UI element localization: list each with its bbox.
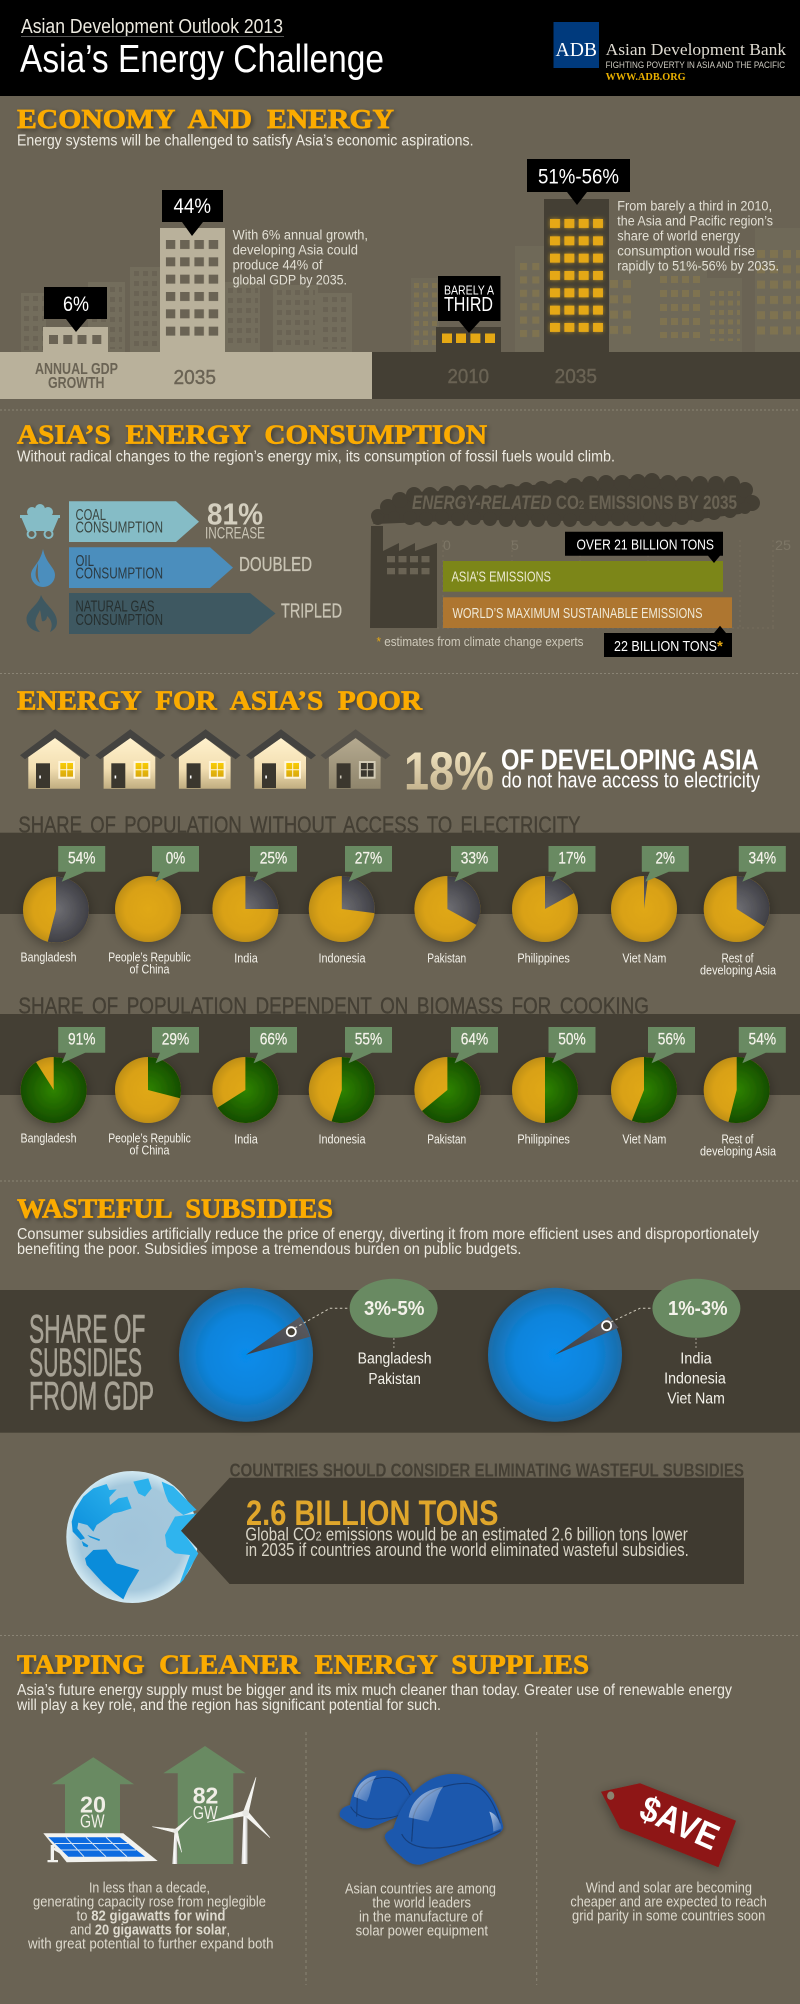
arrow: 20 GW solar: 20 [80, 1791, 106, 1817]
pie: Rest of developing Asia 54%: developing Asia [700, 1145, 776, 1159]
caption: manufacture leaders: solar power equipment [356, 1922, 489, 1939]
caption: grid parity: grid parity in some countries soon [572, 1908, 765, 1925]
pie: Philippines 50% [512, 1027, 596, 1146]
pie: Bangladesh 54%: 54% [68, 849, 96, 867]
text block: 44% of GDP [233, 227, 368, 287]
bar: Asia's emissions [443, 561, 723, 592]
chart heading: without access to electricity: SHARE OF POPULATION WITHOUT ACCESS TO ELECTRICITY [18, 811, 580, 837]
chart: GDP skyline [0, 190, 372, 399]
callout: eliminate wasteful subsidies: Global CO2 emissions would be an estimated 2.6 billion tons lower [245, 1525, 688, 1545]
small lit building 2010 [436, 327, 501, 353]
pie: People's Republic of China 29%: People’s Republic [108, 1132, 191, 1146]
pie: 3%-5% of GDP: Pakistan [368, 1371, 421, 1388]
pie: Bangladesh 54%: Bangladesh [20, 950, 77, 964]
pie: Rest of developing Asia 34%: Rest of [722, 952, 754, 966]
pie: Philippines 50%: 50% [558, 1030, 586, 1048]
caption: grid parity: cheaper and are expected to reach [570, 1894, 767, 1911]
text block: share of world energy [617, 199, 779, 274]
stat: 81% increase: INCREASE [205, 524, 265, 543]
pie: Philippines 17% [512, 846, 596, 965]
caption: grid parity: Wind and solar are becoming [586, 1880, 752, 1897]
stat: 18% without electricity [404, 741, 760, 801]
ground band light [0, 352, 372, 399]
arrow: natural gas consumption: NATURAL GAS [76, 599, 154, 616]
section intro: wasteful subsidies: benefiting the poor. Subsidies impose a tremendous burden on public budgets. [17, 1241, 521, 1258]
caption: capacity growth: generating capacity rose from neglegible [33, 1894, 266, 1911]
pie: Pakistan 33%: Pakistan [427, 951, 466, 965]
stat: 81% increase [205, 496, 265, 543]
section intro: economy and energy: Energy systems will be challenged to satisfy Asia’s economic aspirations. [17, 133, 474, 150]
callout: 6% [44, 287, 107, 332]
pie: 3%-5% of GDP [179, 1279, 438, 1422]
pie: Philippines 50%: Philippines [517, 1132, 570, 1146]
caption: capacity growth: to 82 gigawatts for wind [76, 1908, 226, 1925]
arrow: 82 GW wind [163, 1746, 246, 1864]
ADB logo: Asian Development Bank [606, 40, 787, 59]
panel title: SHARE OF [29, 1308, 145, 1352]
house 4 [246, 729, 316, 789]
caption: capacity growth: with great potential to further expand both [27, 1936, 274, 1953]
pie: Pakistan 64%: Pakistan [427, 1132, 466, 1146]
panel: share of subsidies from GDP [0, 1279, 800, 1433]
pie: Viet Nam 2% [611, 846, 689, 965]
callout: 22 billion tons: 22 BILLION TONS [614, 638, 717, 655]
callout: over 21 billion tons [565, 532, 723, 563]
section intro: cleaner energy: Asia’s future energy supply must be bigger and its mix much cleaner than today. Greater use of renewable energy [17, 1682, 732, 1699]
pie: Viet Nam 2%: Viet Nam [622, 951, 666, 965]
pie: 1%-3% of GDP: Viet Nam [667, 1390, 725, 1407]
text block: share of world energy: From barely a third in 2010, [617, 199, 772, 214]
pie chart row: without electricity [20, 846, 786, 978]
back hard hat [340, 1770, 413, 1828]
text block: 44% of GDP: With 6% annual growth, [233, 227, 368, 242]
pie: 3%-5% of GDP: Bangladesh [358, 1350, 432, 1367]
icon: oil drop [31, 549, 55, 587]
pie: 1%-3% of GDP: 1%-3% [668, 1298, 728, 1320]
label: 2010: 2010 [448, 366, 489, 388]
pie: Rest of developing Asia 54% [700, 1027, 786, 1159]
chart: energy consumption skyline [372, 159, 800, 399]
icon: globe [66, 1471, 198, 1603]
pie: India 66% [212, 1027, 297, 1146]
pie: People's Republic of China 29%: 29% [162, 1030, 190, 1048]
text block: 44% of GDP: developing Asia could [233, 242, 358, 257]
axis labels: 0 [443, 537, 451, 553]
arrow: oil consumption: CONSUMPTION [76, 566, 163, 583]
section heading: energy for Asia's poor: ENERGY FOR ASIA’S POOR [17, 684, 423, 715]
smoke cloud with chart title: ENERGY-RELATED CO2 EMISSIONS BY 2035 [412, 493, 737, 514]
ADB logo: ADB [556, 39, 597, 61]
panel title: FROM GDP [29, 1374, 154, 1418]
pie: People's Republic of China 0% [108, 846, 199, 976]
section intro: cleaner energy [16, 1682, 732, 1714]
pie: India 25% [212, 846, 297, 965]
pie: Pakistan 33% [414, 846, 498, 965]
icon: solar panel [43, 1833, 158, 1862]
icon: wind turbines [152, 1777, 270, 1864]
caption: manufacture leaders: in the manufacture of [359, 1908, 483, 1925]
axis labels: 25 [775, 537, 791, 553]
label: annual GDP growth: GROWTH [48, 375, 104, 392]
arrow: oil consumption: OIL [76, 553, 94, 570]
stat: 81% increase: 81% [207, 496, 263, 531]
section heading: economy and energy: ECONOMY AND ENERGY [17, 103, 394, 134]
callout: eliminate wasteful subsidies: 2.6 BILLION TONS [246, 1494, 498, 1533]
arrow: oil consumption [69, 547, 233, 588]
arrow: coal consumption [69, 501, 199, 542]
pie: Rest of developing Asia 54%: Rest of [722, 1133, 754, 1147]
icon: hard hats [340, 1770, 503, 1865]
pie: Pakistan 33%: 33% [461, 849, 489, 867]
house 3 [171, 729, 241, 789]
bar: world's maximum sustainable emissions: WORLD’S MAXIMUM SUSTAINABLE EMISSIONS [452, 605, 702, 622]
pie: Bangladesh 91%: Bangladesh [20, 1132, 77, 1146]
section heading: cleaner energy: TAPPING CLEANER ENERGY SUPPLIES [17, 1648, 589, 1679]
callout: over 21 billion tons: OVER 21 BILLION TONS [576, 536, 714, 553]
bar: Asia's emissions: ASIA’S EMISSIONS [452, 569, 551, 586]
arrow: natural gas consumption: CONSUMPTION [76, 612, 163, 629]
pie: Rest of developing Asia 34% [700, 846, 786, 978]
label: 2035 dark: 2035 [555, 366, 597, 388]
pie: Bangladesh 91% [20, 1027, 105, 1146]
label: 2035: 2035 [174, 367, 216, 389]
main title: Asia’s Energy Challenge [20, 38, 384, 81]
pie: Indonesia 55%: Indonesia [318, 1132, 366, 1146]
pie: Viet Nam 2%: 2% [656, 849, 675, 867]
stat: 18% without electricity: 18% [404, 741, 494, 801]
section intro: wasteful subsidies: Consumer subsidies artificially reduce the price of energy, diverting it from more efficient uses and disproportionately [17, 1226, 759, 1243]
section intro: energy consumption: Without radical changes to the region’s energy mix, its consumption of fossil fuels would climb. [17, 449, 615, 466]
callout: eliminate wasteful subsidies [181, 1461, 744, 1584]
pie: 1%-3% of GDP [488, 1279, 740, 1422]
callout: 51%-56% [527, 159, 630, 205]
callout: 22 billion tons: * [717, 638, 723, 655]
pie: People's Republic of China 0%: People’s Republic [108, 950, 191, 964]
pie: People's Republic of China 0%: of China [130, 962, 170, 976]
pie: Bangladesh 91%: 91% [68, 1030, 96, 1048]
panel title: SUBSIDIES [29, 1341, 142, 1385]
text block: share of world energy: share of world energy [617, 229, 740, 244]
section intro: cleaner energy: will play a key role, and the region has significant potential for such. [16, 1697, 441, 1714]
arrow: natural gas consumption [69, 593, 276, 634]
tall building 44% [160, 228, 225, 353]
callout: barely a third: BARELY A [444, 283, 494, 298]
callout: 22 billion tons [604, 626, 732, 657]
section intro: wasteful subsidies [17, 1226, 759, 1258]
panel title [29, 1308, 154, 1418]
icon: save price tag: $AVE [634, 1787, 726, 1858]
text block: 44% of GDP: global GDP by 2035. [233, 272, 347, 287]
caption: manufacture leaders: Asian countries are among [345, 1880, 496, 1897]
icon: save price tag [601, 1783, 736, 1867]
pie: People's Republic of China 29% [108, 1027, 199, 1158]
callout: 51%-56%: 51%-56% [538, 165, 619, 188]
icon: gas flame [26, 595, 57, 632]
pie: Viet Nam 56%: 56% [658, 1030, 686, 1048]
pie: Rest of developing Asia 34%: developing Asia [700, 964, 776, 978]
pie: Indonesia 27%: Indonesia [318, 951, 366, 965]
smoke cloud with chart title [371, 473, 760, 527]
pie: Pakistan 64% [414, 1027, 498, 1146]
axis labels: 5 [511, 537, 519, 553]
label: annual GDP growth [35, 361, 118, 392]
pie: India 25%: India [234, 951, 258, 965]
pie: India 66%: India [234, 1132, 258, 1146]
pie: India 66%: 66% [260, 1030, 288, 1048]
callout: 44% [162, 190, 223, 236]
caption: capacity growth: and 20 gigawatts for solar, [70, 1922, 230, 1939]
pie: People's Republic of China 29%: of China [130, 1144, 170, 1158]
arrow: 82 GW wind: 82 [193, 1782, 218, 1808]
ADB logo: FIGHTING POVERTY IN ASIA AND THE PACIFIC [606, 60, 786, 70]
pie: Indonesia 27%: 27% [355, 849, 383, 867]
pie: 1%-3% of GDP: India [680, 1350, 712, 1367]
pie: Pakistan 64%: 64% [461, 1030, 489, 1048]
callout: barely a third: THIRD [444, 294, 493, 316]
caption: capacity growth [27, 1880, 274, 1953]
pie: Indonesia 55% [309, 1027, 392, 1146]
pie: 3%-5% of GDP: 3%-5% [364, 1298, 425, 1320]
pie: Viet Nam 56% [611, 1027, 695, 1146]
chart grid [437, 540, 775, 628]
ADB logo: WWW.ADB.ORG [606, 72, 686, 83]
report name: Asian Development Outlook 2013 [21, 16, 283, 38]
chart: energy-related CO2 emissions [370, 473, 791, 657]
pie: India 25%: 25% [260, 849, 288, 867]
bar: world's maximum sustainable emissions [443, 597, 732, 628]
caption: manufacture leaders [345, 1880, 496, 1939]
factory [370, 526, 437, 628]
ADB logo [554, 22, 787, 83]
pie: Indonesia 55%: 55% [355, 1030, 383, 1048]
arrow: coal consumption: CONSUMPTION [76, 520, 163, 537]
text block: share of world energy: consumption would rise [617, 244, 755, 259]
pie: Philippines 17%: 17% [558, 849, 586, 867]
text block: share of world energy: rapidly to 51%-56% by 2035. [617, 259, 779, 274]
callout: 6%: 6% [63, 293, 89, 316]
pie chart row: biomass [20, 1027, 786, 1159]
house 1 [20, 729, 90, 789]
caption: manufacture leaders: the world leaders [372, 1894, 471, 1911]
pie: Rest of developing Asia 34%: 34% [749, 849, 776, 867]
pie: Bangladesh 54% [20, 846, 105, 964]
stat: doubled: DOUBLED [239, 554, 312, 576]
callout: barely a third [438, 276, 500, 333]
caption: grid parity [570, 1880, 767, 1925]
section heading: wasteful subsidies: WASTEFUL SUBSIDIES [17, 1192, 333, 1223]
small building 6% [43, 327, 108, 353]
caption: capacity growth: In less than a decade, [89, 1880, 210, 1897]
arrow: coal consumption: COAL [76, 507, 106, 524]
arrow: 82 GW wind: GW [193, 1803, 218, 1823]
ground band dark [372, 352, 800, 399]
chart heading: dependent on biomass: SHARE OF POPULATION DEPENDENT ON BIOMASS FOR COOKING [18, 992, 649, 1018]
stat: tripled: TRIPLED [281, 601, 342, 623]
section heading: energy consumption: ASIA’S ENERGY CONSUMPTION [17, 418, 487, 449]
pie: Rest of developing Asia 54%: 54% [749, 1030, 776, 1048]
arrow: 20 GW solar [52, 1757, 134, 1845]
house 5 unlit [321, 729, 391, 789]
pie: People's Republic of China 0%: 0% [166, 849, 186, 867]
footnote: * estimates from climate change experts [376, 634, 584, 649]
icon: coal cart [20, 504, 60, 539]
axis labels [443, 537, 791, 553]
tall lit building 2035 [544, 199, 609, 353]
pie: 1%-3% of GDP: Indonesia [664, 1370, 726, 1387]
front hard hat [385, 1774, 503, 1865]
callout: eliminate wasteful subsidies: in 2035 if countries around the world eliminated wasteful subsidies. [245, 1540, 689, 1560]
icon row: five houses [20, 729, 391, 789]
arrow: 20 GW solar: GW [80, 1811, 105, 1831]
text block: 44% of GDP: produce 44% of [233, 257, 323, 272]
text block: share of world energy: the Asia and Pacific region’s [617, 214, 773, 229]
pie: Philippines 17%: Philippines [517, 951, 570, 965]
pie: Viet Nam 56%: Viet Nam [622, 1132, 666, 1146]
callout: 44%: 44% [174, 195, 211, 218]
label: annual GDP growth: ANNUAL GDP [35, 361, 118, 378]
house 2 [95, 729, 165, 789]
header banner [0, 0, 800, 96]
pie: Indonesia 27% [309, 846, 392, 965]
